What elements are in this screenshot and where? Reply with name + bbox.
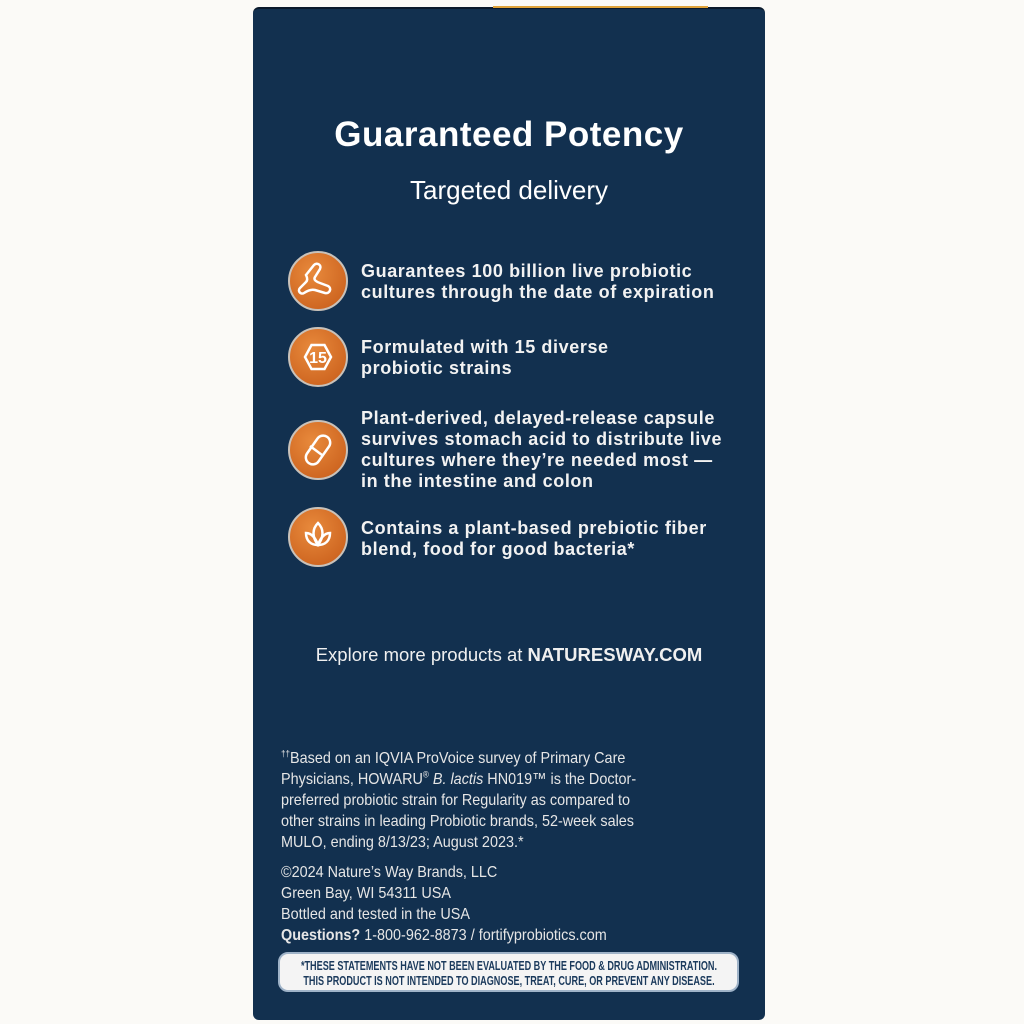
disclaimer box <box>278 952 739 992</box>
footnote: Physicians, HOWARU® B. lactis HN019™ is the Doctor- <box>281 770 636 788</box>
text: 100 billion: Guarantees 100 billion live probiotic <box>361 261 692 281</box>
footnote: MULO, ending 8/13/23; August 2023.* <box>281 834 524 851</box>
subtitle: Targeted delivery <box>410 175 608 205</box>
text: prebiotic fiber: Contains a plant-based prebiotic fiber <box>361 518 707 538</box>
company info <box>281 864 607 944</box>
company info: ©2024 Nature’s Way Brands, LLC <box>281 864 497 881</box>
icon: probiotic cultures <box>288 251 348 311</box>
icon: plant <box>288 507 348 567</box>
icon: 15 strains <box>288 327 348 387</box>
company info: Bottled and tested in the USA <box>281 906 470 923</box>
icon: 15 strains: 15 <box>309 350 327 367</box>
title: Guaranteed Potency <box>334 115 684 154</box>
company info: Questions? 1-800-962-8873 / fortifyprobiotics.com <box>281 927 607 944</box>
text: 15 strains <box>361 337 609 378</box>
disclaimer box: THIS PRODUCT IS NOT INTENDED TO DIAGNOSE, TREAT, CURE, OR PREVENT ANY DISEASE. <box>303 973 715 988</box>
text: 100 billion <box>361 261 714 302</box>
text: prebiotic fiber: blend, food for good bacteria* <box>361 539 635 559</box>
text: explore: Explore more products at NATURESWAY.COM <box>316 644 702 665</box>
footnote <box>281 749 636 851</box>
footnote: ††Based on an IQVIA ProVoice survey of Primary Care <box>281 749 625 767</box>
top accent <box>493 6 708 8</box>
text: capsule: in the intestine and colon <box>361 471 594 491</box>
footnote: other strains in leading Probiotic brands, 52-week sales <box>281 813 634 830</box>
panel: product box <box>253 7 765 1020</box>
text: capsule: survives stomach acid to distribute live <box>361 429 722 449</box>
text: capsule <box>361 408 722 491</box>
text: 15 strains: Formulated with 15 diverse <box>361 337 609 357</box>
disclaimer box: *THESE STATEMENTS HAVE NOT BEEN EVALUATED BY THE FOOD & DRUG ADMINISTRATION. <box>301 958 717 973</box>
text: capsule: Plant-derived, delayed-release capsule <box>361 408 715 428</box>
footnote: preferred probiotic strain for Regularity as compared to <box>281 792 630 809</box>
text: 100 billion: cultures through the date of expiration <box>361 282 714 302</box>
text: capsule: cultures where they’re needed most — <box>361 450 713 470</box>
icon: capsule <box>288 420 348 480</box>
text: prebiotic fiber <box>361 518 707 559</box>
company info: Green Bay, WI 54311 USA <box>281 885 451 902</box>
text: 15 strains: probiotic strains <box>361 358 512 378</box>
